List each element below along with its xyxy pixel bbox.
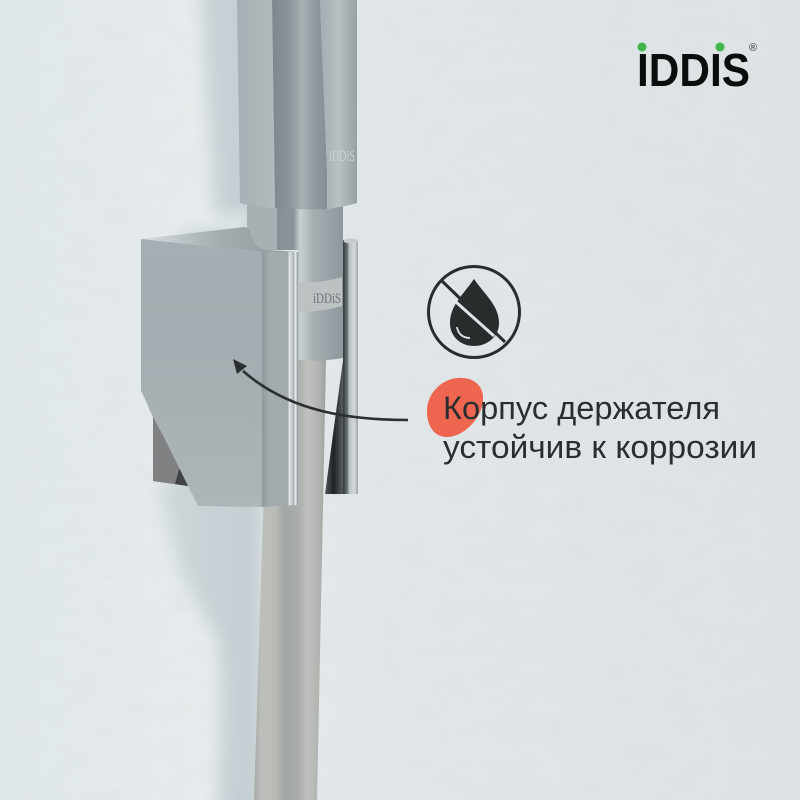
bracket side curve	[262, 252, 298, 507]
icon: crossed-out water drop	[428, 266, 520, 358]
caption	[443, 390, 757, 465]
bracket holder	[141, 227, 298, 507]
caption: устойчив к коррозии	[443, 429, 757, 465]
shower head neck	[247, 205, 343, 361]
shower hose	[254, 360, 326, 800]
shower head body: iDDiS	[329, 148, 355, 165]
wall shadow	[160, 0, 262, 800]
logo: IDDIS: IDDIS	[637, 44, 750, 96]
bracket front face	[141, 239, 262, 507]
logo: IDDIS: ®	[749, 42, 757, 54]
orange accent blob	[427, 378, 483, 437]
shower head body	[237, 0, 357, 209]
bracket under part	[144, 398, 198, 506]
bracket top edge	[141, 227, 298, 252]
rear bracket arm	[325, 238, 358, 494]
logo ring	[298, 277, 342, 312]
caption: Корпус держателя	[443, 390, 720, 426]
arrow	[233, 359, 408, 420]
logo ring: iDDiS	[313, 291, 341, 307]
